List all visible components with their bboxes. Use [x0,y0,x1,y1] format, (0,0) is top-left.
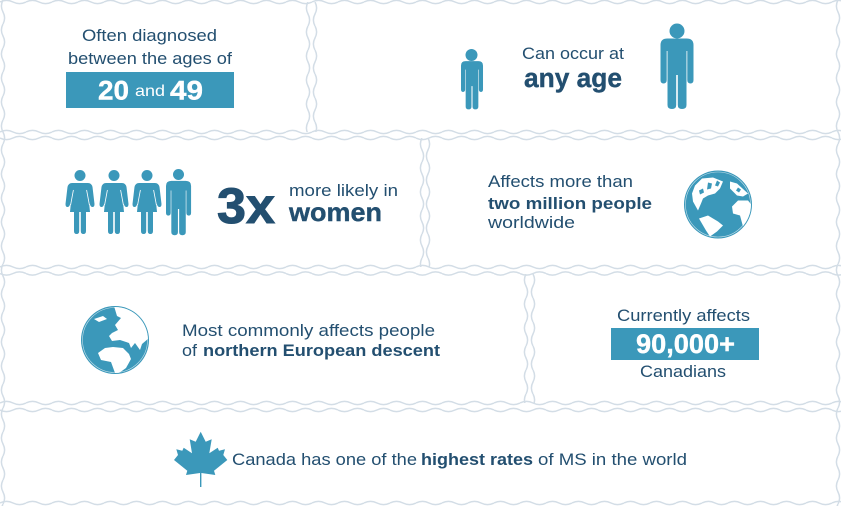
text: of northern European descent: northern European descent [203,341,440,360]
statistic banner: 90,000+: 90,000+ [636,329,735,359]
icon: maple leaf [174,432,227,487]
text: Canada highest rates of MS: of MS in the world [538,450,687,469]
text: women: women [288,197,382,227]
text: two million people: two million people [488,194,652,213]
icon: three women and one man [66,169,191,235]
text: any age: any age [524,63,622,93]
age range banner: 20 [98,76,129,106]
panel: two million worldwide [487,170,753,238]
text: between the ages of: between the ages of [68,49,232,68]
text: Canada highest rates of MS: highest rates [421,450,533,469]
panel: diagnosed between 20 and 49 [66,26,234,108]
icon: globe showing Europe and Africa [81,306,149,374]
text: often diagnosed: Often diagnosed [82,26,217,45]
text: affects more than: Affects more than [488,172,633,191]
text: more likely in: more likely in [289,181,398,200]
statistic banner: 90,000+ [611,328,759,360]
text: Canada highest rates of MS [232,450,687,469]
text: most commonly affects people: Most commonly affects people [182,321,435,340]
age range banner [66,72,234,108]
panel: 90,000+ Canadians [611,306,759,381]
text: currently affects: Currently affects [617,306,750,325]
text: Canada highest rates of MS: Canada has one of the [232,450,417,469]
age range banner: and [135,83,165,100]
icon: tall person [660,24,694,109]
text: can occur at: Can occur at [522,44,624,63]
text: Canadians: Canadians [640,362,726,381]
icon: globe showing the Americas [684,170,753,238]
text: of northern European descent: of [182,341,197,360]
age range banner: 49 [170,76,203,106]
panel: 3x more likely in women [66,169,398,235]
panel: northern European descent [81,306,440,374]
icon: small person [461,49,483,109]
panel: can occur at any age [461,24,694,109]
text: worldwide: worldwide [487,213,575,232]
panel: highest rates in the world [174,432,687,487]
statistic: 3x: 3x [217,178,275,234]
